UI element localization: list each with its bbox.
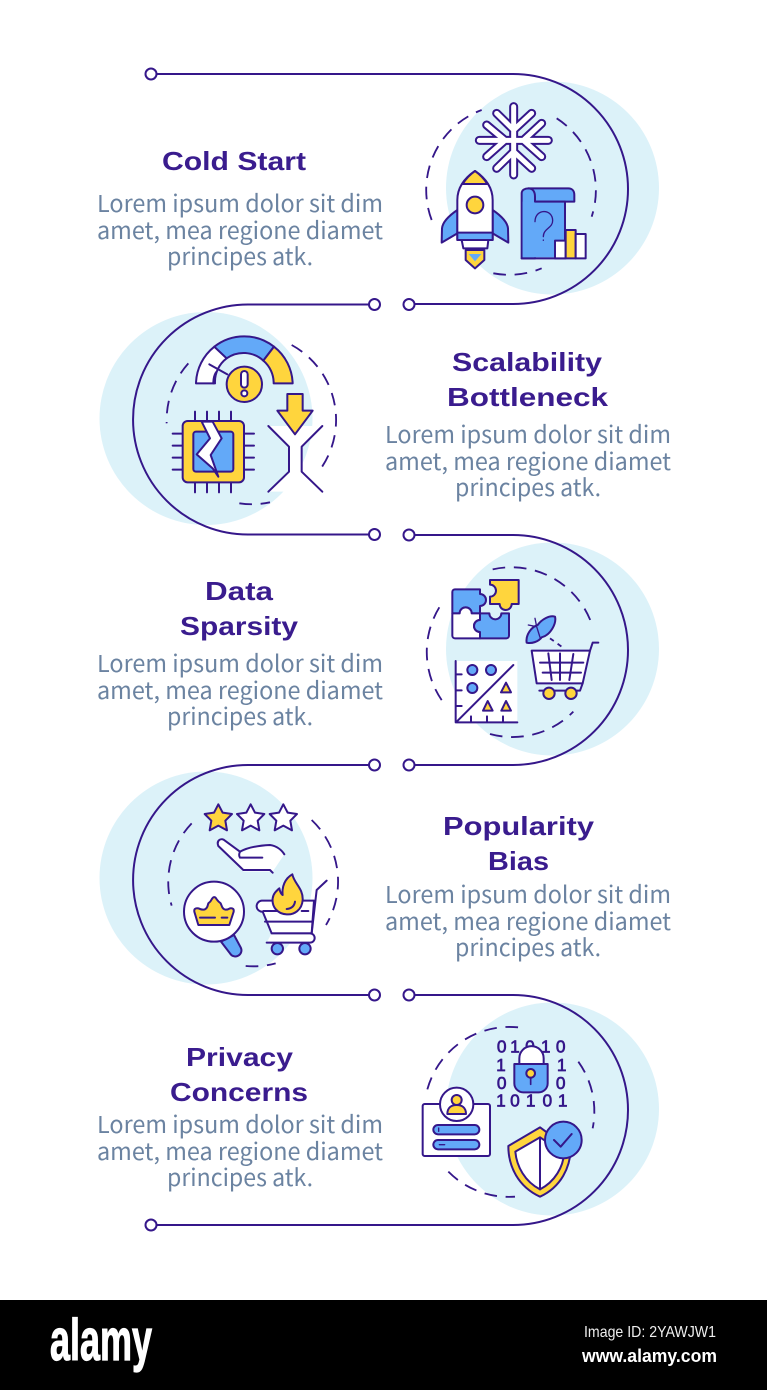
icon: shield with check	[508, 1122, 582, 1197]
icon: binary digits with padlock: 1	[541, 1036, 550, 1056]
icon: binary digits with padlock: 0	[510, 1091, 520, 1111]
body text: privacy concerns: principes atk.	[167, 1159, 313, 1193]
icon: gauge	[196, 336, 293, 402]
body text: popularity bias: principes atk.	[455, 929, 601, 963]
body text: data sparsity: amet, mea regione diamet	[97, 672, 383, 706]
body text: scalability bottleneck	[385, 416, 671, 503]
icon: binary digits with padlock: 0	[497, 1036, 506, 1056]
icon: binary digits with padlock: 1	[558, 1091, 567, 1111]
body text: data sparsity	[97, 645, 383, 732]
icon: binary digits with padlock: 0	[497, 1073, 506, 1093]
icon: broken chip	[173, 412, 254, 492]
icon: lock, id card and shield	[423, 1027, 594, 1197]
body text: cold start: principes atk.	[167, 238, 313, 272]
icon: gauge, chip and funnel	[167, 336, 336, 504]
panel: scalability bottleneck	[100, 299, 671, 540]
background circle: popularity bias	[100, 772, 312, 984]
icon: rating stars	[205, 804, 297, 830]
icon: binary digits with padlock	[496, 1036, 567, 1111]
icon: id card	[423, 1088, 490, 1156]
icon: binary digits with padlock: 1	[496, 1055, 506, 1075]
icon: snowflake	[479, 107, 548, 175]
panel: data sparsity	[97, 530, 659, 770]
heading: data sparsity: Sparsity	[180, 611, 299, 641]
connector line: scalability bottleneck	[133, 299, 380, 540]
icon: binary digits with padlock: 1	[496, 1091, 506, 1111]
icon: scroll with question mark and bars	[522, 188, 586, 258]
body text: cold start	[97, 185, 383, 272]
icon: scatter chart	[456, 661, 517, 722]
icon: rocket	[442, 171, 508, 268]
panel: popularity bias	[100, 760, 671, 1000]
body text: data sparsity: principes atk.	[167, 698, 313, 732]
heading: popularity bias	[443, 811, 595, 876]
icon: funnel with arrow	[268, 394, 322, 492]
heading: scalability bottleneck: Bottleneck	[447, 382, 609, 412]
icon: binary digits with padlock: 1	[526, 1091, 535, 1111]
body text: cold start: Lorem ipsum dolor sit dim	[97, 185, 383, 219]
icon: binary digits with padlock: 0	[543, 1091, 552, 1111]
panel: privacy concerns	[97, 990, 659, 1230]
heading: privacy concerns	[170, 1042, 308, 1107]
icon: binary digits with padlock: 0	[556, 1036, 565, 1056]
heading: popularity bias: Popularity	[443, 811, 595, 841]
icon: snowflake, rocket and scroll	[426, 107, 596, 275]
background circle: scalability bottleneck	[100, 312, 312, 525]
background circle: privacy concerns	[446, 1002, 659, 1216]
icon: puzzle	[452, 580, 519, 638]
icon: open hand	[217, 839, 284, 873]
footer bar	[0, 1300, 767, 1390]
connector line: data sparsity	[404, 530, 628, 770]
heading: privacy concerns: Privacy	[186, 1042, 294, 1072]
icon: binary digits with padlock: 0	[525, 1036, 535, 1056]
body text: cold start: amet, mea regione diamet	[97, 212, 383, 246]
background circle: data sparsity	[446, 542, 659, 756]
heading: cold start: Cold Start	[162, 146, 306, 176]
icon: magnifier with crown	[184, 882, 244, 956]
body text: scalability bottleneck: Lorem ipsum dolor sit dim	[385, 416, 671, 450]
body text: popularity bias: amet, mea regione diamet	[385, 903, 671, 937]
body text: popularity bias: Lorem ipsum dolor sit dim	[385, 876, 671, 910]
icon: puzzle, chart and cart	[427, 567, 598, 737]
body text: popularity bias	[385, 876, 671, 963]
heading: data sparsity: Data	[205, 576, 274, 606]
heading: popularity bias: Bias	[488, 846, 549, 876]
heading: data sparsity	[180, 576, 299, 641]
connector line: popularity bias	[133, 760, 380, 1000]
body text: scalability bottleneck: amet, mea regione diamet	[385, 443, 671, 477]
icon: binary digits with padlock: 1	[557, 1055, 566, 1075]
image id: Image ID: 2YAWJW1	[584, 1324, 716, 1341]
heading: scalability bottleneck: Scalability	[452, 347, 603, 377]
website: www.alamy.com	[581, 1346, 717, 1366]
connector line: privacy concerns	[146, 990, 628, 1230]
body text: data sparsity: Lorem ipsum dolor sit dim	[97, 645, 383, 679]
body text: scalability bottleneck: principes atk.	[455, 469, 601, 503]
icon: shopping cart	[532, 643, 598, 699]
logo: alamy: alamy	[50, 1308, 152, 1373]
background circle: cold start	[446, 82, 659, 294]
icon: stars, hand, magnifier and cart	[168, 804, 338, 966]
icon: cart with flame	[257, 874, 327, 954]
body text: privacy concerns: Lorem ipsum dolor sit dim	[97, 1106, 383, 1140]
heading: scalability bottleneck	[447, 347, 609, 412]
icon: binary digits with padlock: 0	[556, 1073, 565, 1093]
heading: privacy concerns: Concerns	[170, 1077, 308, 1107]
body text: privacy concerns: amet, mea regione diamet	[97, 1133, 383, 1167]
icon: binary digits with padlock: 1	[510, 1036, 520, 1056]
panel: cold start	[97, 68, 659, 310]
body text: privacy concerns	[97, 1106, 383, 1193]
icon: moth	[526, 616, 555, 643]
connector line: cold start	[146, 68, 628, 310]
